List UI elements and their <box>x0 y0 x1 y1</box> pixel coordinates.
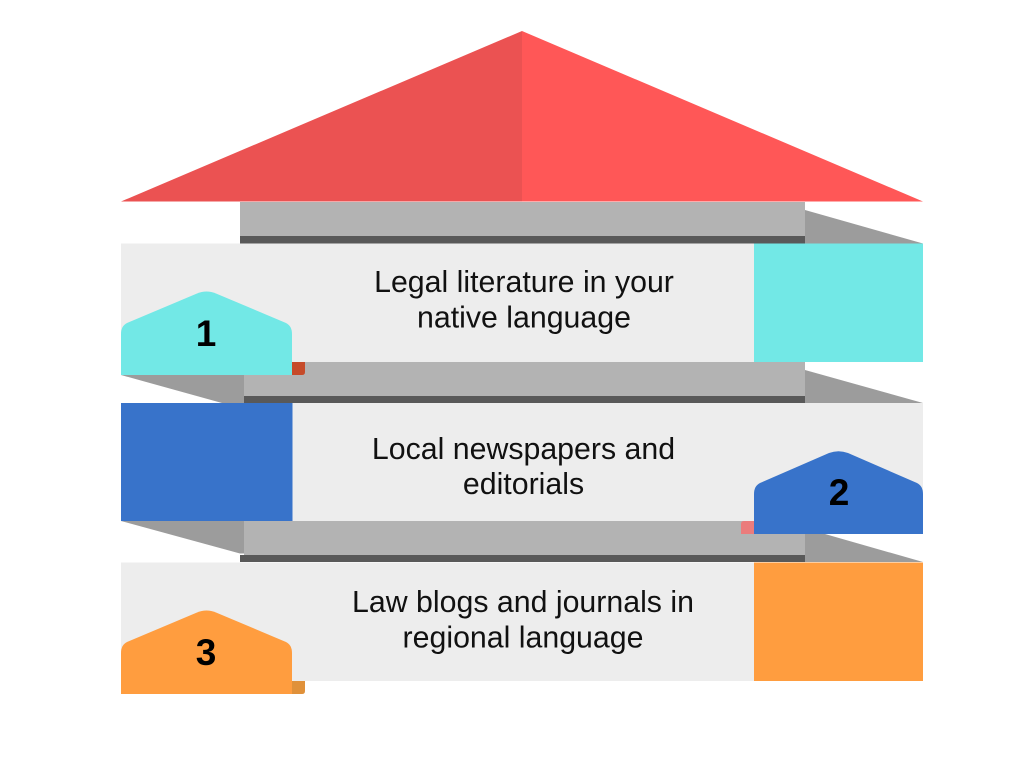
text: law blogs: regional language <box>403 622 643 654</box>
connector: top floor beam <box>240 202 923 244</box>
badge 3 <box>121 610 292 694</box>
text: local newspapers <box>372 433 675 501</box>
connector: third floor beam <box>121 521 923 562</box>
text: local newspapers: editorials <box>463 468 584 501</box>
badge 2 <box>754 451 923 534</box>
tab fold: level 3 <box>292 681 305 694</box>
band 3 background <box>121 562 923 681</box>
badge 3: 3 <box>196 632 216 673</box>
band 3 colour block <box>754 562 923 681</box>
text: legal literature <box>374 266 674 334</box>
text: local newspapers: Local newspapers and <box>372 433 675 466</box>
band 1 colour block <box>754 244 923 362</box>
panel: level 3 <box>121 562 923 681</box>
badge 1: 1 <box>196 313 216 354</box>
band 1 background <box>121 244 923 362</box>
badge 1 <box>121 292 292 375</box>
text: law blogs <box>352 586 694 654</box>
panel: level 1 <box>121 244 923 362</box>
band 2 colour block <box>121 403 292 521</box>
text: law blogs: Law blogs and journals in <box>352 586 694 619</box>
text: legal literature: native language <box>417 302 631 334</box>
text: legal literature: Legal literature in your <box>374 266 674 299</box>
roof <box>121 31 923 202</box>
badge 2: 2 <box>829 472 849 513</box>
panel: level 2 <box>121 403 923 521</box>
tab fold: level 1 <box>292 362 305 375</box>
band 2 background <box>121 403 923 521</box>
tab fold: level 2 <box>741 521 754 534</box>
connector: second floor beam <box>121 362 923 403</box>
